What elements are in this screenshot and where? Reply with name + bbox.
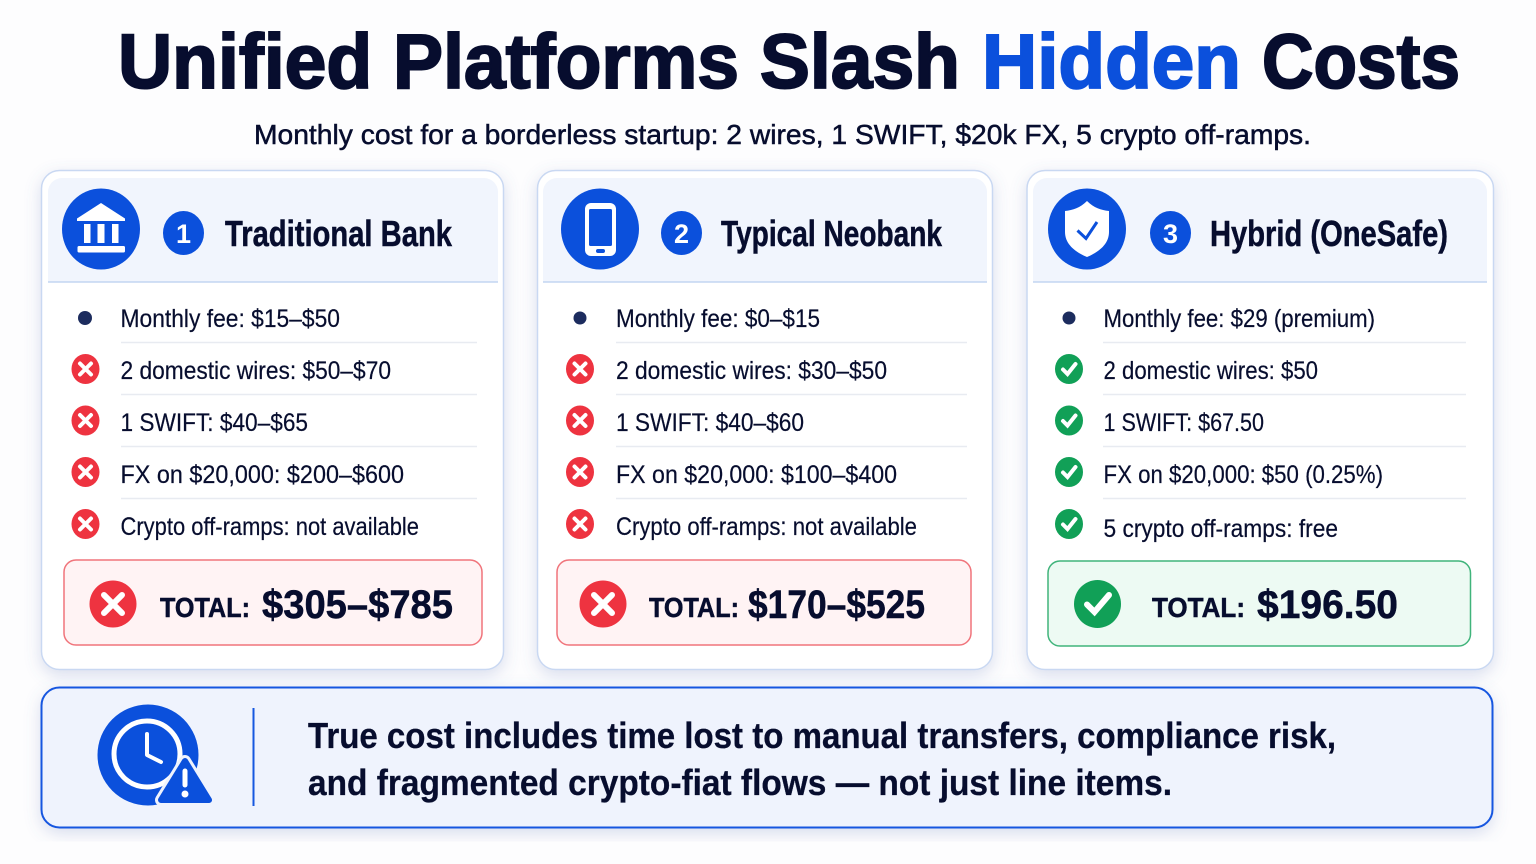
callout: true cost bbox=[42, 688, 1492, 828]
row: fx: FX on $20,000: $50 (0.25%) bbox=[1104, 461, 1383, 489]
number badge 3 bbox=[1150, 211, 1191, 255]
number badge 3: 3 bbox=[1163, 219, 1178, 249]
number badge 1: 1 bbox=[176, 219, 191, 249]
number badge 1 bbox=[163, 211, 204, 255]
total: hybrid onesafe: TOTAL: bbox=[1152, 592, 1245, 623]
row: swift bbox=[566, 406, 804, 437]
row: domestic wires: 2 domestic wires: $30–$50 bbox=[616, 357, 887, 385]
row: crypto bbox=[72, 509, 419, 541]
total: typical neobank bbox=[557, 560, 971, 645]
icon: shield bbox=[1048, 188, 1126, 270]
row: swift: 1 SWIFT: $67.50 bbox=[1104, 409, 1264, 437]
panel header: traditional bank bbox=[48, 178, 498, 282]
row: swift bbox=[1055, 406, 1264, 437]
row: swift: 1 SWIFT: $40–$60 bbox=[616, 409, 804, 437]
row: fx bbox=[1055, 457, 1383, 489]
panel: traditional bank bbox=[42, 170, 504, 670]
row: crypto bbox=[566, 509, 917, 541]
panel: typical neobank bbox=[538, 170, 992, 670]
panel: hybrid onesafe bbox=[1027, 170, 1494, 670]
heading: typical neobank: Typical Neobank bbox=[721, 213, 943, 254]
total: typical neobank: $170–$525 bbox=[748, 583, 925, 627]
number badge 2: 2 bbox=[674, 219, 689, 249]
callout text: True cost includes time lost to manual transfers, compliance risk, bbox=[308, 715, 1336, 756]
total: typical neobank: TOTAL: bbox=[649, 592, 739, 623]
row: crypto: 5 crypto off-ramps: free bbox=[1104, 515, 1338, 543]
row: domestic wires bbox=[1055, 354, 1318, 385]
row: fx: FX on $20,000: $100–$400 bbox=[616, 461, 897, 489]
total: traditional bank bbox=[64, 560, 482, 645]
row: domestic wires: 2 domestic wires: $50–$70 bbox=[120, 357, 391, 385]
icon: clock with warning bbox=[98, 704, 209, 806]
heading: hybrid onesafe: Hybrid (OneSafe) bbox=[1210, 213, 1448, 254]
title: Costs bbox=[1262, 19, 1460, 105]
total: hybrid onesafe bbox=[1048, 561, 1470, 646]
callout text: and fragmented crypto-fiat flows — not just line items. bbox=[308, 762, 1172, 803]
total: traditional bank: $305–$785 bbox=[262, 583, 453, 627]
title: Hidden bbox=[982, 19, 1241, 105]
callout text bbox=[308, 715, 1336, 803]
row: crypto bbox=[1055, 509, 1338, 543]
panel header: hybrid onesafe bbox=[1033, 178, 1487, 282]
row: crypto: Crypto off-ramps: not available bbox=[616, 513, 917, 541]
number badge 2 bbox=[661, 211, 702, 255]
row: swift: 1 SWIFT: $40–$65 bbox=[120, 409, 308, 437]
row: swift bbox=[72, 406, 308, 437]
panel header: typical neobank bbox=[543, 178, 987, 282]
title: Unified Platforms Slash bbox=[118, 19, 960, 105]
row: monthly fee: Monthly fee: $0–$15 bbox=[616, 305, 820, 333]
row: domestic wires: 2 domestic wires: $50 bbox=[1104, 357, 1318, 385]
row: monthly fee: Monthly fee: $29 (premium) bbox=[1104, 305, 1375, 333]
icon: bank bbox=[62, 188, 140, 270]
row: fx: FX on $20,000: $200–$600 bbox=[120, 461, 404, 489]
row: crypto: Crypto off-ramps: not available bbox=[120, 513, 419, 541]
row: monthly fee: Monthly fee: $15–$50 bbox=[120, 305, 340, 333]
icon: phone bbox=[561, 188, 639, 270]
total: traditional bank: TOTAL: bbox=[160, 592, 250, 623]
subtitle: Monthly cost for a borderless startup: 2 wires, 1 SWIFT, $20k FX, 5 crypto off-ramps. bbox=[254, 119, 1311, 150]
title bbox=[118, 19, 1460, 105]
total: hybrid onesafe: $196.50 bbox=[1257, 583, 1398, 627]
heading: traditional bank: Traditional Bank bbox=[225, 213, 453, 254]
